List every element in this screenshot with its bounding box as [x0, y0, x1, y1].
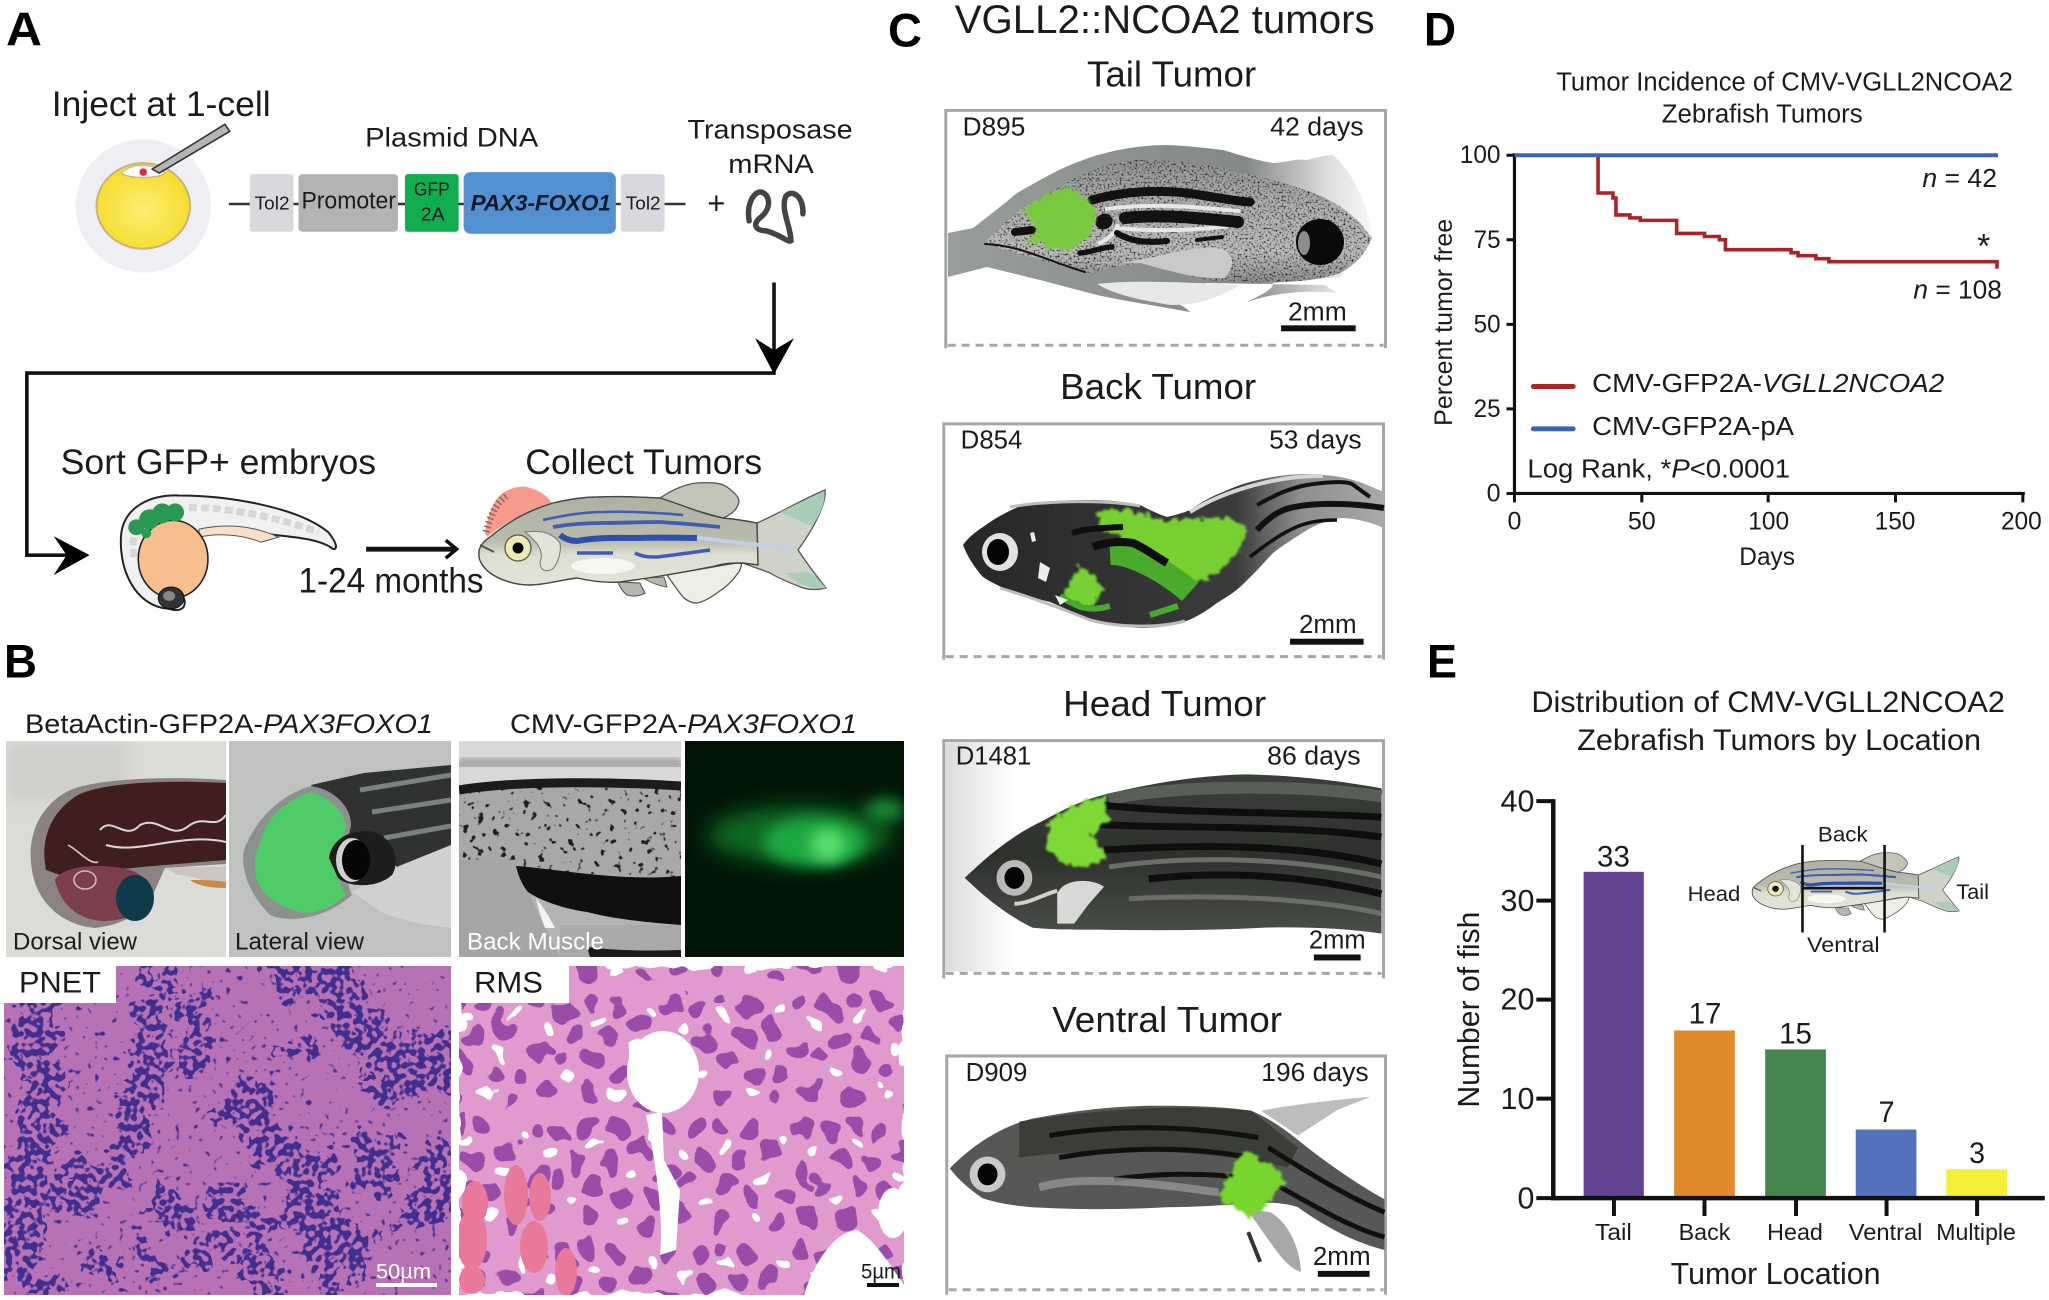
annotations: *: [1977, 228, 1990, 266]
plasmid construct diagram: [229, 172, 685, 234]
head tumor panel: D1481: [956, 743, 1031, 771]
x category labels: Ventral: [1849, 1219, 1922, 1245]
x category labels: Multiple: [1936, 1219, 2016, 1245]
annotations: [1913, 165, 2002, 305]
chart title: [1531, 686, 2005, 757]
back tumor frame: 2mm: [1299, 611, 1357, 639]
axes: 0: [1517, 1181, 1534, 1216]
photo labels: [13, 928, 604, 956]
chart title: Zebrafish Tumors by Location: [1577, 724, 1981, 757]
curve: CMV-GFP2A-VGLL2NCOA2: [1598, 155, 1997, 269]
legend: CMV-GFP2A-pA: [1592, 413, 1795, 441]
axes: [1451, 784, 2045, 1216]
chart title: Distribution of CMV-VGLL2NCOA2: [1531, 686, 2005, 719]
inset: fish regions: Tail: [1956, 881, 1989, 904]
icon: injected egg: [76, 124, 230, 273]
inset: fish regions: Back: [1818, 824, 1868, 847]
panel B: histology and tumor photos: [4, 709, 908, 1296]
head tumor panel: 2mm: [1309, 927, 1366, 955]
plasmid construct diagram: 2A: [421, 204, 445, 225]
axes: 50: [1628, 507, 1656, 535]
photo labels: Back Muscle: [467, 928, 604, 956]
axes: 50: [1474, 310, 1501, 338]
inset: fish regions: Ventral: [1807, 934, 1880, 957]
histology: PNET: 50µm: [376, 1260, 431, 1284]
axes: 40: [1501, 784, 1534, 819]
photo: back tumor fish: [963, 474, 1384, 628]
value labels: 3: [1969, 1137, 1985, 1170]
tail tumor frame: 42 days: [1270, 113, 1364, 141]
axes: 100: [1748, 507, 1789, 535]
back tumor frame: [944, 367, 1384, 660]
panel label B: B: [4, 634, 37, 688]
panel C lower: head and ventral tumors: [944, 684, 1386, 1295]
x category labels: Back: [1679, 1219, 1731, 1245]
curve: CMV-GFP2A-pA: [1514, 153, 1998, 157]
axes: 200: [2001, 507, 2042, 535]
x category labels: Head: [1767, 1219, 1823, 1245]
panel label A: A: [6, 2, 42, 56]
plasmid construct diagram: Promoter: [301, 187, 396, 214]
photo: lateral view: [229, 741, 451, 957]
plus sign: +: [707, 185, 725, 221]
axes: 0: [1508, 507, 1521, 535]
histology: PNET: PNET: [19, 966, 101, 1000]
axes: 100: [1460, 141, 1501, 169]
x axis title: Tumor Location: [1671, 1256, 1881, 1291]
x category labels: [1595, 1219, 2016, 1245]
label: transposase mRNA: Transposase: [687, 114, 853, 144]
photo: back muscle brightfield: [459, 741, 681, 957]
icon: embryo: [121, 495, 336, 610]
label: inject at 1-cell: Inject at 1-cell: [52, 85, 271, 124]
heading: CMV construct: CMV-GFP2A- PAX3FOXO1: [510, 709, 857, 739]
photo: back muscle GFP fluorescence: [685, 741, 905, 957]
panel label E: E: [1427, 634, 1457, 688]
panel C upper: heading, tail and back frames: [944, 0, 1386, 660]
tail tumor frame: [946, 55, 1386, 348]
back tumor frame: D854: [961, 427, 1022, 455]
chart title: Tumor Incidence of CMV-VGLL2NCOA2: [1556, 69, 2013, 97]
icon: adult zebrafish with head tumor: [479, 483, 826, 603]
ventral tumor panel: 196 days: [1261, 1059, 1369, 1087]
chart title: [1556, 69, 2013, 128]
axes: Days: [1739, 543, 1795, 571]
value labels: 15: [1779, 1017, 1812, 1050]
icon: mRNA squiggle: [749, 192, 803, 241]
value labels: 7: [1879, 1096, 1895, 1129]
axes: Percent tumor free: [1430, 219, 1458, 426]
ventral tumor panel: 2mm: [1313, 1243, 1371, 1271]
plasmid construct diagram: Tol2: [626, 193, 661, 214]
tail tumor frame: Tail Tumor: [1087, 55, 1256, 95]
axes: 75: [1474, 226, 1501, 254]
tail tumor frame: D895: [963, 113, 1025, 141]
plasmid construct diagram: Tol2: [255, 193, 290, 214]
axes: [1430, 141, 2042, 571]
axes: 10: [1501, 1081, 1534, 1116]
inset: fish regions: [1688, 824, 1989, 957]
photo: tail tumor fish: [948, 145, 1373, 312]
panel E: bar chart: [1451, 686, 2045, 1291]
plasmid construct diagram: PAX3-FOXO1: [471, 190, 611, 215]
label: collect tumors: Collect Tumors: [525, 443, 762, 482]
axes: 0: [1487, 479, 1501, 507]
bars: [1584, 872, 2007, 1198]
legend: CMV-GFP2A- VGLL2NCOA2: [1592, 370, 1944, 398]
tail tumor frame: 2mm: [1288, 298, 1347, 326]
back tumor frame: 53 days: [1269, 427, 1362, 455]
label: time: 1-24 months: [298, 562, 484, 601]
panel A: injection workflow: [27, 85, 853, 610]
axes: 150: [1875, 507, 1915, 535]
ventral tumor panel: [947, 1000, 1386, 1295]
value labels: [1597, 840, 1985, 1170]
histology: PNET: [4, 966, 451, 1295]
back tumor frame: Back Tumor: [1060, 367, 1256, 407]
chart title: Zebrafish Tumors: [1662, 100, 1863, 128]
value labels: 33: [1597, 840, 1630, 873]
plasmid construct diagram: GFP: [414, 180, 450, 201]
inset: fish regions: Head: [1688, 883, 1740, 906]
photo labels: Dorsal view: [13, 928, 138, 956]
heading: BetaActin construct: BetaActin-GFP2A- PAX3FOXO1: [25, 709, 433, 739]
head tumor panel: Head Tumor: [1063, 684, 1266, 724]
legend: Log Rank, * P<0.0001: [1527, 456, 1790, 484]
panel label D: D: [1424, 2, 1456, 56]
label: transposase mRNA: [687, 114, 853, 179]
head tumor panel: 86 days: [1267, 743, 1361, 771]
legend: [1527, 370, 1944, 484]
panel D: Kaplan-Meier chart: [1430, 69, 2042, 571]
x category labels: Tail: [1595, 1219, 1632, 1245]
photo labels: Lateral view: [235, 928, 365, 956]
head tumor panel: [944, 684, 1384, 978]
label: transposase mRNA: mRNA: [728, 149, 814, 179]
ventral tumor panel: D909: [966, 1059, 1027, 1087]
panel label C: C: [888, 4, 922, 56]
histology: RMS: RMS: [474, 966, 543, 1000]
annotations: n = 108: [1913, 277, 2002, 305]
axes: 20: [1501, 982, 1534, 1017]
histology: RMS: [457, 966, 908, 1296]
photo: dorsal view: [6, 741, 226, 957]
histology: RMS: 5µm: [861, 1260, 901, 1284]
arrow: injection to sorting: [27, 283, 794, 575]
label: sort GFP+ embryos: Sort GFP+ embryos: [61, 443, 376, 482]
label: plasmid DNA: Plasmid DNA: [365, 122, 538, 152]
axes: 25: [1474, 395, 1501, 423]
axes: 30: [1501, 883, 1534, 918]
ventral tumor panel: Ventral Tumor: [1052, 1000, 1282, 1040]
arrow: 1-24 months: [366, 540, 457, 558]
value labels: 17: [1689, 998, 1721, 1031]
annotations: n = 42: [1922, 165, 1997, 193]
axes: Number of fish: [1451, 912, 1486, 1108]
